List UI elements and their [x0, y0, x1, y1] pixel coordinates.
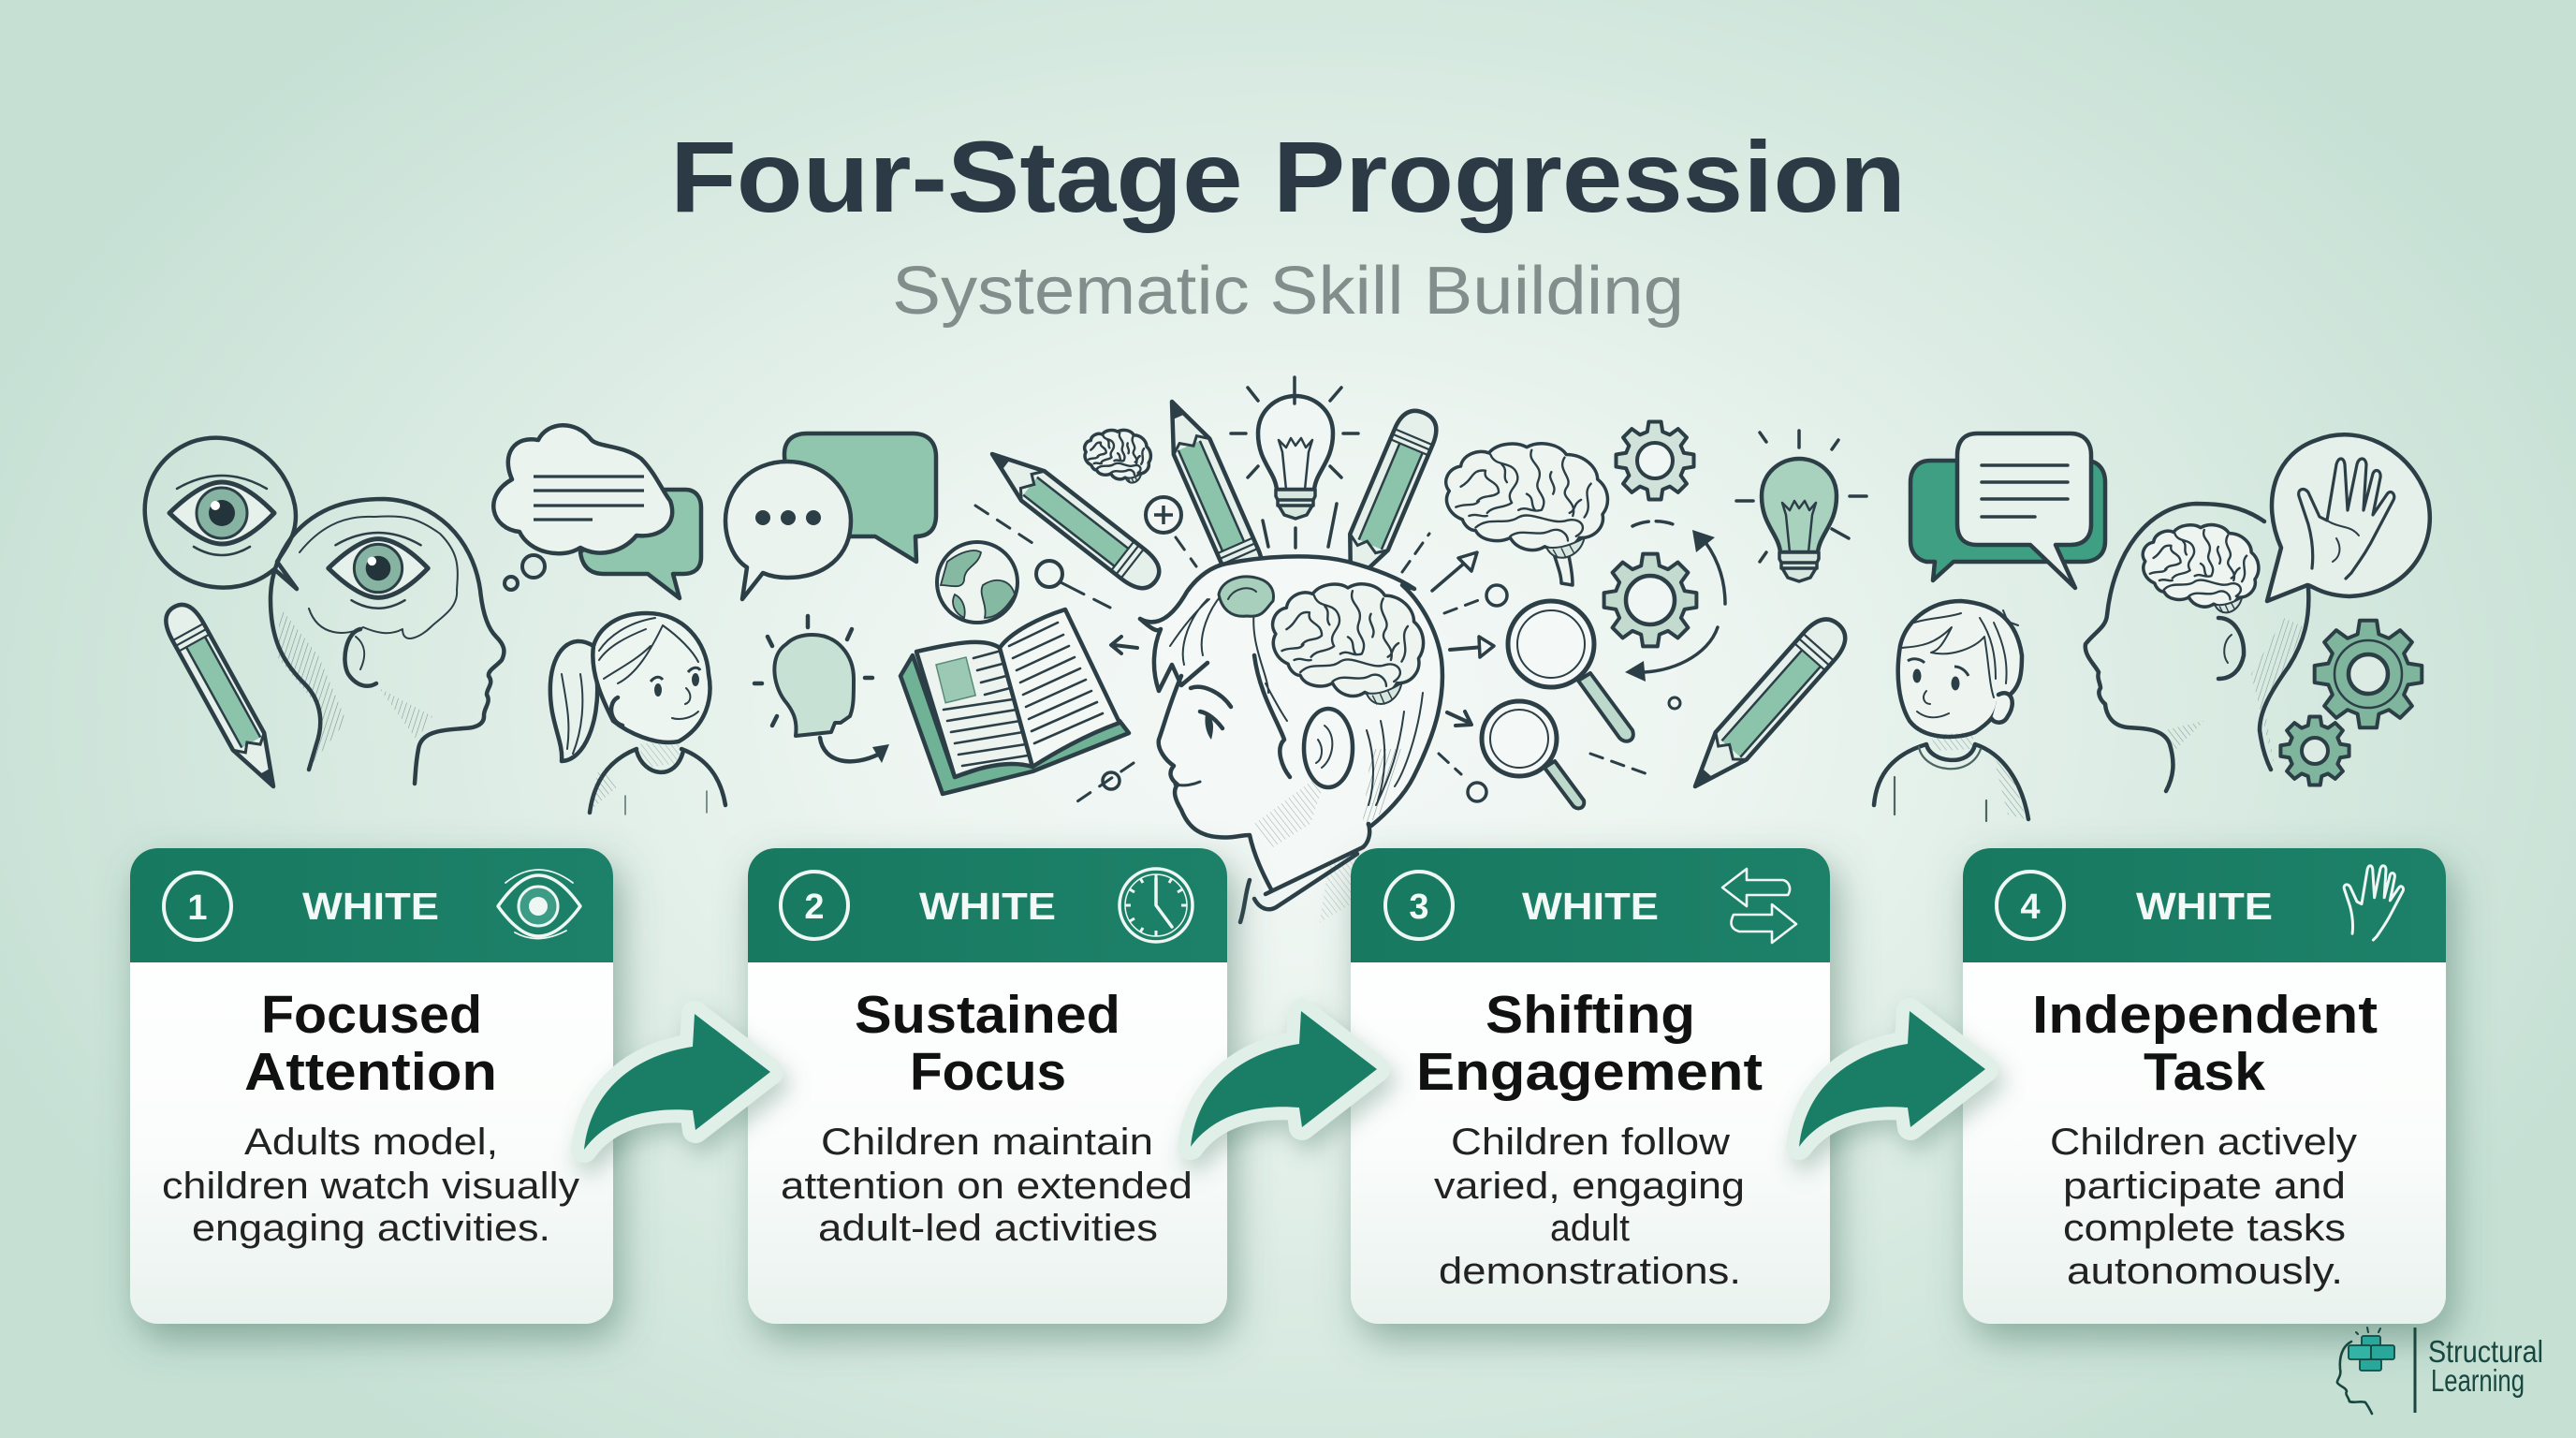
icon: teal speech bubbles [1910, 433, 2105, 588]
icon: eye speech bubble [145, 438, 297, 589]
card 4 description: autonomously. [2067, 1251, 2343, 1292]
card 2 description: Children maintain [821, 1122, 1153, 1163]
card 2 header label: WHITE [919, 885, 1056, 928]
panel: card 3 shifting engagement [1351, 848, 1830, 1324]
card 4 number badge: 4 [2020, 888, 2041, 927]
icon: tall pencil right [1332, 404, 1442, 594]
icon: middle gear [1604, 554, 1696, 646]
icon: central lightbulb [1231, 377, 1358, 548]
card 4 title: Task [2144, 1042, 2265, 1102]
icon: small magnifier [1482, 701, 1584, 808]
card 4 description: complete tasks [2063, 1208, 2346, 1249]
icon: globe [937, 542, 1017, 623]
card 3 switch arrows icon [1722, 869, 1796, 943]
card 1 eye icon [498, 870, 580, 939]
icon: left pencil [159, 598, 289, 795]
card 3 header label: WHITE [1522, 885, 1659, 928]
card 1 description [162, 1122, 579, 1249]
card 2 header band [748, 848, 1227, 962]
card 1 title: Focused [261, 985, 482, 1045]
logo: Structural Learning [2337, 1328, 2543, 1414]
card 4 header band [1963, 848, 2446, 962]
panel: card 2 sustained focus [748, 848, 1227, 1324]
card 4 header label: WHITE [2136, 885, 2273, 928]
card 2 title: Sustained [855, 985, 1120, 1045]
connector dashes left of head [975, 506, 1196, 801]
icon: small brain [1085, 430, 1150, 483]
card 3 description: varied, engaging [1434, 1166, 1745, 1207]
icon: green speech bubble behind cloud [580, 490, 701, 598]
card 1 number badge [164, 873, 231, 940]
card 1 description: Adults model, [244, 1122, 498, 1163]
icon: right pencil [1680, 610, 1854, 800]
icon: green square speech bubble [784, 433, 936, 562]
card 3 description: Children follow [1451, 1122, 1730, 1163]
icon: right head profile with brain [2086, 504, 2308, 791]
card 2 description: attention on extended [781, 1166, 1193, 1207]
card 3 description: adult [1550, 1208, 1630, 1249]
subtitle: Systematic Skill Building [892, 254, 1684, 329]
icon: big green gear [2315, 621, 2422, 727]
card 4 description [2050, 1122, 2357, 1292]
card 3 header band [1351, 848, 1830, 962]
panel: card 4 independent task [1963, 848, 2446, 1324]
arrow: card 3 to card 4 [1799, 1011, 1985, 1147]
card 1 header band [130, 848, 613, 962]
icon: lightbulb head with arrow [754, 616, 889, 763]
card 3 description: demonstrations. [1439, 1251, 1741, 1292]
card 2 number badge [781, 872, 848, 939]
illustration: boy on the right [1874, 601, 2028, 821]
icon: large brain [1446, 444, 1607, 585]
card 2 title: Focus [910, 1042, 1066, 1102]
card 3 title [1416, 985, 1763, 1102]
card 2 number badge: 2 [804, 888, 825, 927]
card 4 number badge [1997, 872, 2064, 939]
card 1 description: children watch visually [162, 1166, 579, 1207]
card 3 description [1434, 1122, 1745, 1292]
icon: hand speech bubble [2267, 434, 2430, 601]
icon: green lightbulb [1736, 431, 1866, 581]
card 1 description: engaging activities. [192, 1208, 550, 1249]
card 1 title: Attention [244, 1042, 497, 1102]
card 2 clock icon [1120, 869, 1193, 942]
card 1 title [244, 985, 497, 1102]
card 3 number badge [1385, 872, 1453, 939]
logo: Structural Learning: Learning [2431, 1363, 2525, 1398]
icon: tall pencil left [1154, 394, 1269, 590]
icon: white speech bubble with dots [725, 462, 851, 599]
icon: open book [900, 609, 1129, 794]
icon: cycle arrows around gear [1625, 521, 1725, 682]
icon: top gear [1617, 422, 1693, 499]
icon: left head profile with eye [271, 499, 504, 784]
illustration: girl with ponytail [550, 613, 725, 814]
card 4 description: participate and [2063, 1166, 2346, 1207]
logo: Structural Learning: Structural [2428, 1334, 2543, 1369]
arrow: card 2 to card 3 [1191, 1011, 1377, 1147]
card 3 title: Engagement [1416, 1042, 1763, 1102]
card 1 header label: WHITE [302, 885, 439, 928]
icon: thought cloud with lines [493, 425, 672, 590]
panel: card 1 focused attention [130, 848, 613, 1324]
icon: large magnifier [1508, 601, 1633, 741]
card 2 description: adult-led activities [818, 1208, 1158, 1249]
card 3 title: Shifting [1486, 985, 1695, 1045]
card 1 number badge: 1 [187, 888, 208, 928]
card 4 title [2032, 985, 2378, 1102]
card 4 title: Independent [2032, 985, 2378, 1045]
card 3 number badge: 3 [1409, 888, 1429, 927]
icon: plus circle [1146, 497, 1181, 533]
title: Four-Stage Progression [670, 120, 1906, 233]
card 2 title [855, 985, 1120, 1102]
card 2 description [781, 1122, 1193, 1249]
icon: small green gear [2280, 716, 2349, 785]
card 4 hand icon [2344, 866, 2404, 940]
card 4 description: Children actively [2050, 1122, 2357, 1163]
icon: radiating arrows right of head [1111, 534, 1680, 801]
icon: pencil pointing upper left [981, 439, 1166, 596]
illustration: central boy with brain [1140, 556, 1442, 922]
arrow: card 1 to card 2 [584, 1014, 770, 1150]
